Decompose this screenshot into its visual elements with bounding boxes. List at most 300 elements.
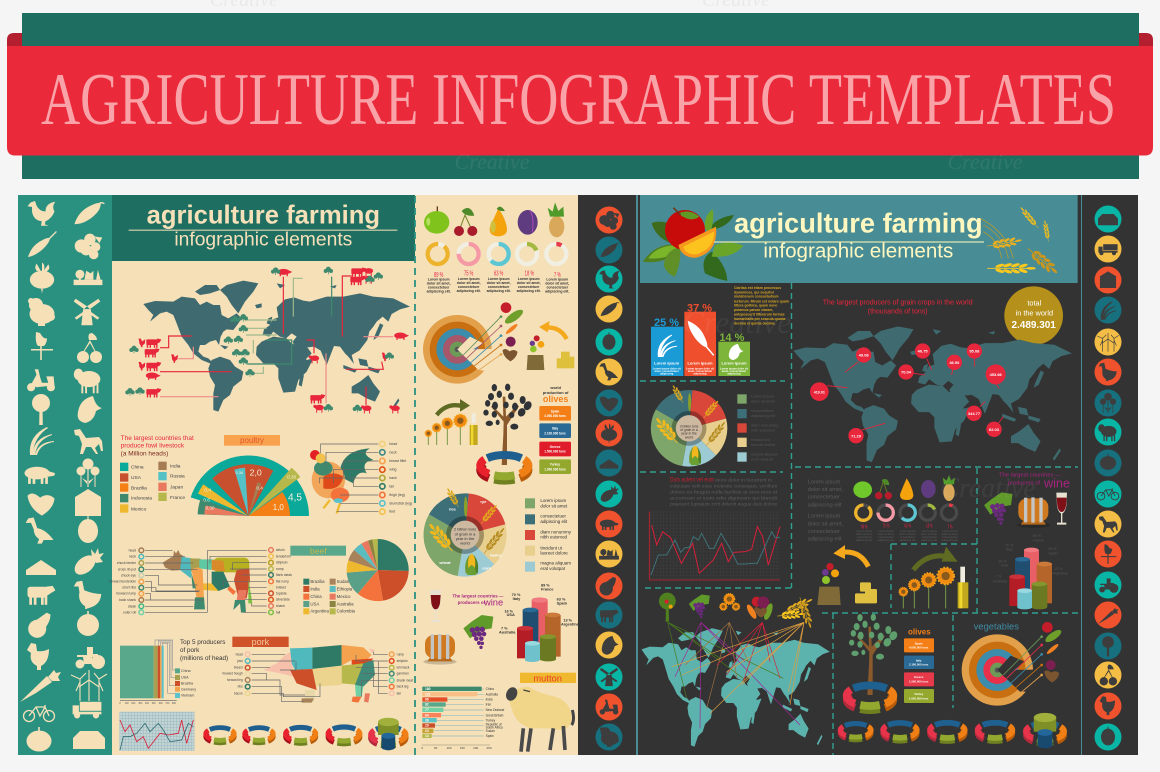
chart: percentage bars: Lorem Ipsum xyxy=(654,361,680,366)
labels: wine percentages: Italy xyxy=(513,597,521,601)
heading: infographic elements: infographic elements xyxy=(763,240,953,263)
legend: small pie: nibh euismod xyxy=(751,428,775,433)
illustration: cow diagram: tenderloin xyxy=(276,554,291,558)
icon: windmill xyxy=(74,299,100,325)
icon: tractor xyxy=(76,647,105,669)
text: fruit captions dark: adipiscing elit. xyxy=(856,538,873,542)
illustration: pig diagram: rump xyxy=(397,652,404,656)
illustration: rooster diagram: tail xyxy=(389,484,394,488)
labels: wine percentages dark: 13 % xyxy=(1054,567,1063,571)
map markers: grain pins: 344.77 xyxy=(968,411,981,416)
icon: windmill xyxy=(600,668,618,686)
text: top 5 producers of pork: Top 5 producers xyxy=(180,639,225,646)
icon: tree xyxy=(32,394,50,425)
text: grey lorem blocks: dolor sit amet, xyxy=(808,487,844,493)
icon: duck xyxy=(74,581,101,609)
divider: right teal rule xyxy=(1081,195,1082,755)
text: grey lorem blocks xyxy=(808,479,844,543)
banner: green backing band xyxy=(22,13,1139,179)
icon: farm house xyxy=(73,731,105,749)
legend: small pie: diam nonummy xyxy=(751,423,778,428)
section: dashed divider between cream panels xyxy=(414,196,416,755)
legend: grains: Lorem ipsum xyxy=(540,498,567,503)
illustration: fruit row xyxy=(424,202,564,237)
icon: tractor xyxy=(1099,578,1118,593)
icon: pineapple xyxy=(598,485,619,504)
text: fruit captions dark: Lorem Ipsum xyxy=(900,529,916,533)
legend: beef countries: Brazilia xyxy=(310,579,325,584)
legend: beef countries: Australia xyxy=(337,601,354,606)
illustration: cow diagram: tail xyxy=(276,610,281,614)
illustration: cheese xyxy=(557,352,574,368)
text: fruit percentages xyxy=(434,268,561,279)
text: fruit captions: consectetuer xyxy=(428,286,450,290)
icons: route nodes xyxy=(659,593,815,629)
text: grain pie labels: barley xyxy=(490,552,503,557)
chart: pork stacked bar: 500 xyxy=(152,703,156,705)
text: fruit captions dark: dolor sit amet, xyxy=(856,532,873,536)
icon: bicycle xyxy=(1097,488,1119,500)
labels: wine percentages dark: 16 % xyxy=(998,559,1007,563)
chart: pork stacked bar: 200 xyxy=(131,703,136,705)
panel: dark header band xyxy=(640,195,1078,283)
legend: poultry countries: Brazilia xyxy=(131,485,147,491)
text: grain pie labels: wheat xyxy=(438,560,451,565)
text: fruit captions dark: Lorem Ipsum xyxy=(922,529,938,533)
map markers: grain pins: 71.29 xyxy=(851,433,862,438)
illustration: cow diagram: brisket xyxy=(276,585,286,589)
text: Duis autem paragraph: vulputate velit esse molestie consequat, vel illum xyxy=(670,484,777,490)
icon: scooter xyxy=(27,369,55,391)
chart: fruit donuts dark xyxy=(853,502,957,523)
illustration: rooster diagram: thigh (leg) xyxy=(389,493,405,497)
icon: plum xyxy=(602,332,616,350)
icon: turkey xyxy=(600,727,619,747)
text: fruit percentages: 89 % xyxy=(434,270,443,279)
icon: weather vane xyxy=(1101,544,1116,564)
icon: horse xyxy=(1099,516,1118,532)
chart: mutton producers bars: 96 xyxy=(425,698,429,702)
legend: grains: adipiscing elit xyxy=(540,519,568,524)
text: fruit captions: adipiscing elit. xyxy=(545,290,569,294)
chart: pork stacked bar: Germany xyxy=(181,687,196,691)
map markers: grain pins: 95.08 xyxy=(969,349,980,354)
icon: pig xyxy=(600,520,618,530)
text: vegetables: vegetables xyxy=(974,621,1019,631)
legend: grains: laoreet dolore xyxy=(540,551,568,556)
text: fruit captions: dolor sit amet, xyxy=(545,282,569,286)
chart: mutton producers bars: 121 xyxy=(425,692,431,696)
legend: beef countries: Colombia xyxy=(337,609,356,614)
chart: poultry fan: 0,36 xyxy=(235,470,244,475)
illustration: pig diagram: bacon xyxy=(234,691,243,695)
chart: poultry fan: 2,0 xyxy=(250,468,262,478)
icon: turkey xyxy=(28,298,55,326)
chart: percentage bars: Lorem ipsum dolor sit xyxy=(653,366,681,370)
panel: left teal icon sidebar xyxy=(18,195,112,755)
illustration: cow diagram: outer roll xyxy=(123,610,136,614)
tag: mutton: mutton xyxy=(533,673,562,683)
heading: infographic elements: infographic elements xyxy=(174,230,352,251)
text: yellow paragraph: decima et quinta decima. xyxy=(734,321,775,325)
text: fruit captions dark: consectetuer xyxy=(942,535,958,539)
boxes: olive producers dark: 4.000.000 tons xyxy=(909,646,929,650)
chart: mutton producers bars: 150 xyxy=(460,746,465,750)
illustration: cow diagram: short ribs xyxy=(122,586,136,590)
illustration: rooster diagram: breast fillet xyxy=(389,459,406,463)
icon: pepper xyxy=(600,302,620,316)
text: fruit captions dark: dolor sit amet, xyxy=(878,532,895,536)
watermarks: Creative xyxy=(948,149,1023,174)
text: grey lorem blocks: consectetuer xyxy=(808,529,840,535)
text: largest countries fowl livestock xyxy=(121,435,194,458)
text: yellow paragraph: anteposuerit litterarum formas xyxy=(734,313,785,317)
illustration: sheep xyxy=(504,685,574,752)
boxes: olive producers: 1.500.000 tons xyxy=(544,450,566,454)
icon: rooster xyxy=(28,201,55,226)
icon: farm xyxy=(599,549,619,560)
text: grain crops heading: (thousands of tons) xyxy=(868,308,928,315)
heading: agriculture farming: agriculture farming xyxy=(147,199,380,229)
text: fruit captions dark: dolor sit amet, xyxy=(942,532,959,536)
illustration: pig diagram: gammon xyxy=(397,672,409,676)
illustration: fruit row xyxy=(853,475,955,501)
icon: cow xyxy=(600,610,619,622)
chart: fruit donuts xyxy=(424,240,566,268)
divider: teal strip beside header xyxy=(636,195,638,755)
section: left beef and pork xyxy=(109,539,413,751)
chart: mutton producers bars: 250 xyxy=(487,746,492,750)
illustration: sunflowers dark xyxy=(899,568,954,608)
icon: sheep xyxy=(1098,424,1116,441)
legend: beef countries: Ethiopia xyxy=(337,586,353,591)
text: Duis autem paragraph: iriure dolor in hendrerit in xyxy=(715,478,772,484)
legend: beef countries: Argentina xyxy=(310,609,329,614)
tag: pork xyxy=(232,637,289,647)
text: fruit captions: dolor sit amet, xyxy=(457,281,481,285)
legend: poultry countries: Indonesia xyxy=(131,496,152,502)
text: grey lorem blocks: consectetuer xyxy=(808,495,840,501)
icon: weather vane xyxy=(31,332,53,360)
chart: beef pie xyxy=(347,539,409,601)
text: yellow paragraph: mutationem consuetudium xyxy=(734,295,779,299)
tag: poultry: poultry xyxy=(240,436,264,445)
text: fruit captions dark: consectetuer xyxy=(900,535,915,539)
illustration: pig diagram xyxy=(222,645,413,703)
heading: largest countries producers of wine xyxy=(452,593,504,607)
chart: ring around olive tree xyxy=(480,455,528,481)
legend: beef countries: Sudan xyxy=(337,579,350,584)
illustration: wine glass xyxy=(430,590,441,622)
legend: small pie: consectetuer xyxy=(751,408,774,413)
labels: wine percentages dark: Argentina xyxy=(1052,571,1069,575)
heading: largest countries producers of wine: wine xyxy=(483,597,503,607)
text: fruit percentages dark: 18 % xyxy=(926,524,933,530)
arrow: olive curved xyxy=(437,399,470,415)
illustration: sack of fruit xyxy=(527,335,544,370)
text: fruit percentages: 63 % xyxy=(494,268,503,277)
chart: 3D ring with cylinders xyxy=(371,718,406,750)
text: grey lorem blocks: adipiscing elit xyxy=(808,502,842,508)
boxes: olive producers dark: Italy xyxy=(916,658,922,662)
icon: turnip xyxy=(601,423,617,444)
chart: mutton producers bars: 77 xyxy=(425,708,429,712)
boxes: olive producers: 2.100.000 tons xyxy=(544,431,566,435)
tag: beef: beef xyxy=(310,546,327,556)
illustration: oil bottle dark xyxy=(958,567,968,608)
chart: pork stacked bar: Brazilia xyxy=(181,682,194,686)
legend: small pie: dolor sit amet xyxy=(751,399,776,404)
callout: total in the world: in the world xyxy=(1016,309,1053,318)
icon: hen xyxy=(1100,696,1115,715)
text: fruit captions dark: dolor sit amet, xyxy=(921,532,938,536)
panel: right dark icon circles xyxy=(1094,206,1122,750)
text: fruit captions dark: Lorem Ipsum xyxy=(857,529,873,533)
chart: pork stacked bar: China xyxy=(181,669,192,673)
text: Duis autem paragraph: accumsan et iusto odio dignissim qui blandit xyxy=(670,496,778,502)
map markers: grain pins: 453.66 xyxy=(990,372,1003,377)
section: middle grain, wine, mutton xyxy=(421,487,580,752)
chart: percentage bars: 14 % xyxy=(719,332,745,344)
icon: pepper xyxy=(74,202,105,224)
text: grain crops heading xyxy=(823,299,973,315)
legend: beef countries: India xyxy=(310,586,320,591)
icon: hen xyxy=(27,643,49,670)
text: small pie labels: 3 billion tons xyxy=(680,424,699,428)
section: dark panel top xyxy=(640,195,1078,467)
legend: small pie: erat volutpat xyxy=(751,456,774,461)
text: fruit captions: adipiscing elit. xyxy=(427,290,451,294)
text: top 5 producers of pork: (millions of head) xyxy=(180,655,228,662)
icon: cherries xyxy=(1100,664,1117,686)
arrow: olive curved dark xyxy=(913,547,958,570)
illustration: route lines xyxy=(668,622,804,728)
chart: poultry fan: 0,30 xyxy=(205,505,215,510)
text: grey lorem blocks: adipiscing elit xyxy=(808,537,842,543)
map markers: grain pins xyxy=(810,343,1006,443)
illustration: pig diagram: loin-back xyxy=(397,666,410,670)
boxes: olive producers dark: 1.500.000 tons xyxy=(909,679,929,683)
text: fruit captions: consectetuer xyxy=(488,285,510,289)
legend: grains: tincidunt ut xyxy=(540,545,563,550)
chart: poultry fan: 0,30 xyxy=(287,475,297,480)
text: fruit percentages dark: 63 % xyxy=(904,524,911,530)
chart: poultry fan xyxy=(191,456,309,516)
icon: truck xyxy=(1098,244,1118,255)
icon: cherries xyxy=(77,333,102,363)
section: left map and poultry xyxy=(120,199,412,516)
text: fruit captions dark xyxy=(856,529,959,542)
illustration: cow diagram xyxy=(109,548,292,615)
icon: orange xyxy=(77,611,99,636)
text: fruit percentages: 75 % xyxy=(464,268,473,277)
text: fruit captions: dolor sit amet, xyxy=(517,281,541,285)
illustration: cow diagram: shank xyxy=(276,604,285,608)
illustration: cow diagram: chuck tender xyxy=(117,561,137,565)
icon: pig xyxy=(24,467,55,484)
illustration: pig diagram: ribs xyxy=(238,685,243,689)
text: yellow paragraph: humanitatis per seacula quarta xyxy=(734,317,785,321)
boxes: olive producers: 1.000.000 tons xyxy=(544,467,566,471)
icon: rice xyxy=(30,427,54,455)
illustration: sack dark xyxy=(817,563,841,605)
text: fruit captions dark: consectetuer xyxy=(857,535,872,539)
text: fruit captions: dolor sit amet, xyxy=(487,281,511,285)
chart: 3D ring 1 xyxy=(206,728,234,743)
legend: poultry countries: USA xyxy=(131,475,142,481)
map markers: grain pins: 419.01 xyxy=(814,390,825,394)
labels: wine percentages dark: 89 % xyxy=(1033,534,1042,538)
illustration: grapes dark xyxy=(984,492,1013,525)
chart: mutton producers bars: China xyxy=(486,687,494,691)
chart: dark 3D ring 3 xyxy=(930,723,965,741)
icon: farm xyxy=(74,270,102,285)
illustration: cow diagram: head xyxy=(129,548,136,552)
icon: carrot xyxy=(20,670,61,702)
illustration: wheat bundle xyxy=(980,205,1061,278)
illustration: fruit and leaves xyxy=(643,208,743,281)
banner: left ribbon fold xyxy=(7,33,22,46)
labels: wine percentages: Australia xyxy=(499,630,516,634)
text: grey lorem blocks: Lorem ipsum xyxy=(808,514,841,520)
labels: wine percentages xyxy=(499,584,580,634)
legend: small pie: laoreet dolore xyxy=(751,442,776,447)
heading: wine dark: The largest countries — xyxy=(999,473,1061,479)
icon: plum xyxy=(1101,726,1115,745)
legend: small pie: adipiscing elit xyxy=(751,413,776,418)
map markers: green crops xyxy=(125,267,394,412)
illustration: oil bottle xyxy=(470,413,478,445)
boxes: olive producers dark: 2.100.000 tons xyxy=(909,662,929,666)
icon: barn xyxy=(600,459,618,469)
tag: mutton xyxy=(520,673,576,683)
chart: wine cylinders dark xyxy=(1009,548,1052,609)
text: fruit captions dark: adipiscing elit. xyxy=(878,538,895,542)
map markers: grain pins: 46.90 xyxy=(949,360,960,365)
chart: 3D ring 4 xyxy=(328,727,360,744)
map markers: grain pins: 40.75 xyxy=(918,349,928,354)
boxes: olive producers: 4.000.000 tons xyxy=(544,414,566,418)
icon: rice xyxy=(1101,302,1116,320)
legend: grains: dolor sit amet xyxy=(540,503,568,508)
text: olives dark: olives xyxy=(908,627,931,636)
chart: poultry fan: 0,4 xyxy=(204,488,211,494)
illustration: cow diagram: flat rump xyxy=(276,579,289,583)
text: fruit percentages: 7 % xyxy=(554,270,561,279)
chart: poultry fan: 0,4 xyxy=(256,485,263,490)
text: largest countries fowl livestock: (a Million heads) xyxy=(121,451,168,458)
text: grain pie centre: of grain in a xyxy=(455,531,476,536)
chart: pork stacked bar: Vietnam xyxy=(181,694,194,698)
labels: wine percentages: Spain xyxy=(557,601,568,605)
chart: mutton producers bars: 50 xyxy=(434,746,438,750)
legend: grains: nibh euismod xyxy=(540,535,568,540)
icon: turnip xyxy=(30,263,54,293)
illustration: cow diagram: rump xyxy=(276,567,284,571)
labels: wine percentages dark: France xyxy=(1033,539,1044,543)
icon: corn xyxy=(602,636,619,655)
labels: wine percentages dark: 70 % xyxy=(1005,543,1014,547)
chart: pork stacked bar: 300 xyxy=(138,703,143,705)
text: fruit captions: consectetuer xyxy=(546,286,569,290)
chart: mutton producers bars: India xyxy=(486,698,493,702)
legend: beef countries xyxy=(303,579,356,614)
world map: trade routes xyxy=(642,628,830,747)
icon: leaf xyxy=(599,211,620,230)
labels: wine percentages: Argentina xyxy=(561,622,580,626)
text: grain pie centre xyxy=(454,527,476,546)
legend: small pie: Lorem ipsum xyxy=(751,394,775,399)
map markers: grain pins: 62.03 xyxy=(989,427,1000,432)
text: fruit captions dark: adipiscing elit. xyxy=(942,538,959,542)
heading: agriculture farming: agriculture farming xyxy=(734,208,983,239)
text: fruit percentages dark: 75 % xyxy=(883,524,889,530)
text: fruit captions: dolor sit amet, xyxy=(427,282,451,286)
illustration: cow diagram: chuck eye xyxy=(121,573,136,577)
icon: pepper xyxy=(600,243,620,257)
heading: wine dark: producers of xyxy=(1008,480,1040,486)
section: middle fruits and crops xyxy=(423,202,574,481)
tag: beef xyxy=(290,546,346,556)
chart: percentage bars: adipiscing xyxy=(693,372,707,376)
legend: poultry countries: Japan xyxy=(170,485,183,491)
text: fruit captions: Lorem Ipsum xyxy=(546,278,568,282)
text: small pie labels: year in the xyxy=(681,432,697,436)
text: world production of olives xyxy=(543,385,569,404)
chart: percentage bars: Lorem Ipsum xyxy=(721,361,747,366)
labels: wine percentages: 7 % xyxy=(501,626,508,630)
icon: barn xyxy=(26,560,56,575)
icon: flowers xyxy=(1100,393,1116,413)
chart: mutton producers bars: 13 xyxy=(425,734,429,738)
panel: left dark icon circles xyxy=(596,206,622,750)
chart: percentage bars: amet, consectetuer xyxy=(655,369,679,373)
chart: wine cylinders xyxy=(517,597,561,662)
text: yellow paragraph: putamus parum claram, xyxy=(734,308,773,312)
illustration: rooster diagram: drumstick (leg) xyxy=(389,501,412,505)
labels: wine percentages dark: USA xyxy=(1001,563,1009,567)
legend: grains: diam nonummy xyxy=(540,529,572,534)
boxes: olive producers: Italy xyxy=(552,427,558,431)
text: fruit captions dark: Lorem Ipsum xyxy=(942,529,959,533)
legend: grains: consectetuer xyxy=(540,514,567,519)
labels: wine percentages dark: Italy xyxy=(1006,548,1013,552)
dashed section dividers on dark panel xyxy=(640,283,1078,755)
legend: grains xyxy=(525,498,572,572)
tag: pork: pork xyxy=(252,637,270,647)
world map xyxy=(143,281,410,412)
chart: mutton producers bars: 200 xyxy=(473,746,478,750)
text: grain pie centre: world xyxy=(460,541,470,546)
text: grain pie centre: 2 billion tons xyxy=(454,527,476,532)
text: grey lorem blocks: Lorem ipsum xyxy=(808,479,841,485)
icon: apple xyxy=(26,727,52,752)
chart: mutton producers bars: Australia xyxy=(486,692,498,696)
text: fruit captions dark: consectetuer xyxy=(922,535,937,539)
chart: ring around tree dark xyxy=(847,685,893,710)
chart: mutton producers bars: 0 xyxy=(421,746,423,750)
chart: pork stacked bar: 600 xyxy=(159,703,163,705)
callout: total in the world: total xyxy=(1027,299,1042,308)
labels: wine percentages dark: Spain xyxy=(1048,551,1058,555)
text: fruit captions: Lorem Ipsum xyxy=(458,277,480,281)
watermarks: Creative xyxy=(682,304,792,340)
chart: mutton producers bars: 38 xyxy=(425,718,429,722)
icon: farm house xyxy=(1098,214,1118,225)
chart: pork stacked bar: 700 xyxy=(165,703,170,705)
banner: ribbon with title xyxy=(7,13,1153,179)
illustration: rooster diagram: neck xyxy=(389,450,397,454)
